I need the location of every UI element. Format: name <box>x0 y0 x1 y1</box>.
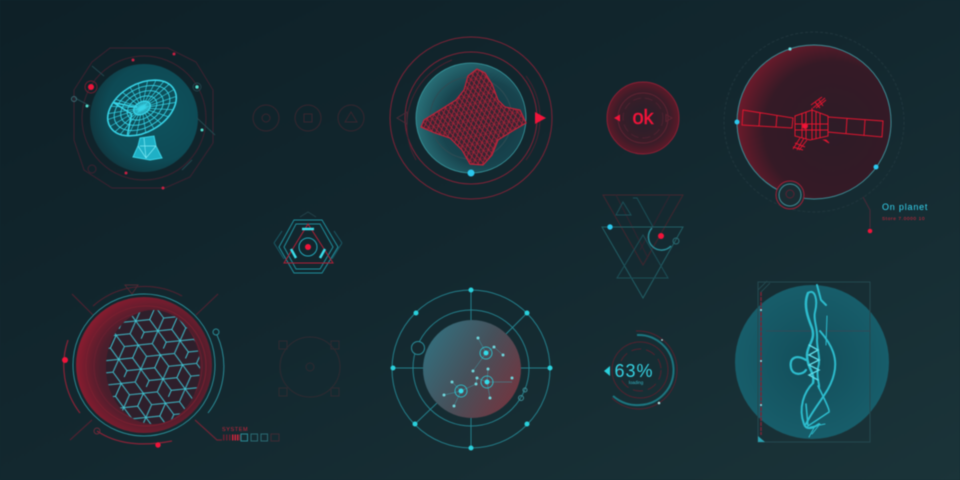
globe <box>423 320 521 418</box>
small teal triangle <box>616 202 631 215</box>
left arrow <box>614 114 620 122</box>
icon: circle <box>253 105 279 131</box>
rhomb ball <box>106 310 201 424</box>
triangles emblem <box>602 195 683 298</box>
frame nodes <box>72 52 204 190</box>
teal slanted line <box>633 198 653 227</box>
level bar <box>223 434 279 441</box>
satellite <box>742 97 883 150</box>
nodes <box>788 47 792 51</box>
cyan bars <box>291 229 325 258</box>
wireframe mountain <box>421 69 526 165</box>
corner <box>758 436 765 442</box>
red arcs <box>612 331 677 409</box>
outer arcs <box>64 286 222 444</box>
icon: square <box>295 105 321 131</box>
red down triangle <box>603 195 683 265</box>
right arrow <box>666 114 672 122</box>
small text: loading <box>629 380 644 385</box>
leader dot <box>868 229 872 233</box>
inner ring <box>430 77 512 159</box>
leader line <box>863 197 870 228</box>
scale nodes <box>760 309 762 406</box>
organism globe <box>735 281 889 442</box>
mountain globe <box>390 37 552 199</box>
orbit rings <box>392 290 550 448</box>
dish wireframe <box>98 69 186 147</box>
red scale <box>760 292 762 435</box>
right arc <box>208 329 224 413</box>
constellation <box>442 336 514 408</box>
hexagon emblem <box>274 212 342 273</box>
octagonal frame <box>74 48 213 188</box>
teal up triangle <box>617 235 668 278</box>
red disc <box>76 297 212 433</box>
marker dots <box>661 339 663 341</box>
frame teal corners <box>75 66 215 170</box>
globe <box>416 63 526 173</box>
faint triangle left <box>397 112 407 124</box>
planet <box>737 45 891 199</box>
faint target <box>279 337 340 397</box>
dish base <box>133 136 162 160</box>
red triangle <box>284 224 333 263</box>
frame ring <box>82 56 206 180</box>
ok text: ok <box>632 107 655 129</box>
ring <box>299 238 317 256</box>
top triangle <box>125 285 138 294</box>
outer rings <box>390 37 552 199</box>
teal arcs <box>613 335 674 405</box>
caption: SYSTEM <box>222 427 248 433</box>
ok button <box>607 82 679 154</box>
percent gauge <box>604 331 677 409</box>
sub caption: Store 7.0000 10 <box>882 216 925 222</box>
small round icons <box>253 105 364 131</box>
organism <box>791 285 835 437</box>
satellite planet <box>724 32 928 233</box>
radar dish globe <box>72 48 215 190</box>
cyan node <box>468 170 474 176</box>
small lens <box>776 181 804 209</box>
hex outlines <box>274 212 342 273</box>
caption: On planet <box>882 202 928 212</box>
red tick <box>766 330 870 332</box>
constellation globe <box>390 288 552 450</box>
rhomb sphere <box>62 285 279 448</box>
corner hatch <box>758 281 770 292</box>
red nodes <box>62 357 68 363</box>
dashed orbit <box>724 32 904 212</box>
teal ring <box>73 294 215 436</box>
play triangle right <box>535 112 546 124</box>
small ring <box>94 428 100 434</box>
frame <box>758 282 870 442</box>
big teal down triangle <box>602 227 683 298</box>
cyan node <box>607 224 613 230</box>
small rings <box>412 342 424 354</box>
percent text: 63% <box>614 361 654 381</box>
globe <box>735 285 889 439</box>
icon: triangle <box>338 105 364 131</box>
orbit nodes <box>390 288 552 450</box>
red node with arc <box>648 228 679 250</box>
center dot <box>305 244 311 250</box>
globe <box>90 64 198 172</box>
left arrow <box>604 366 610 376</box>
